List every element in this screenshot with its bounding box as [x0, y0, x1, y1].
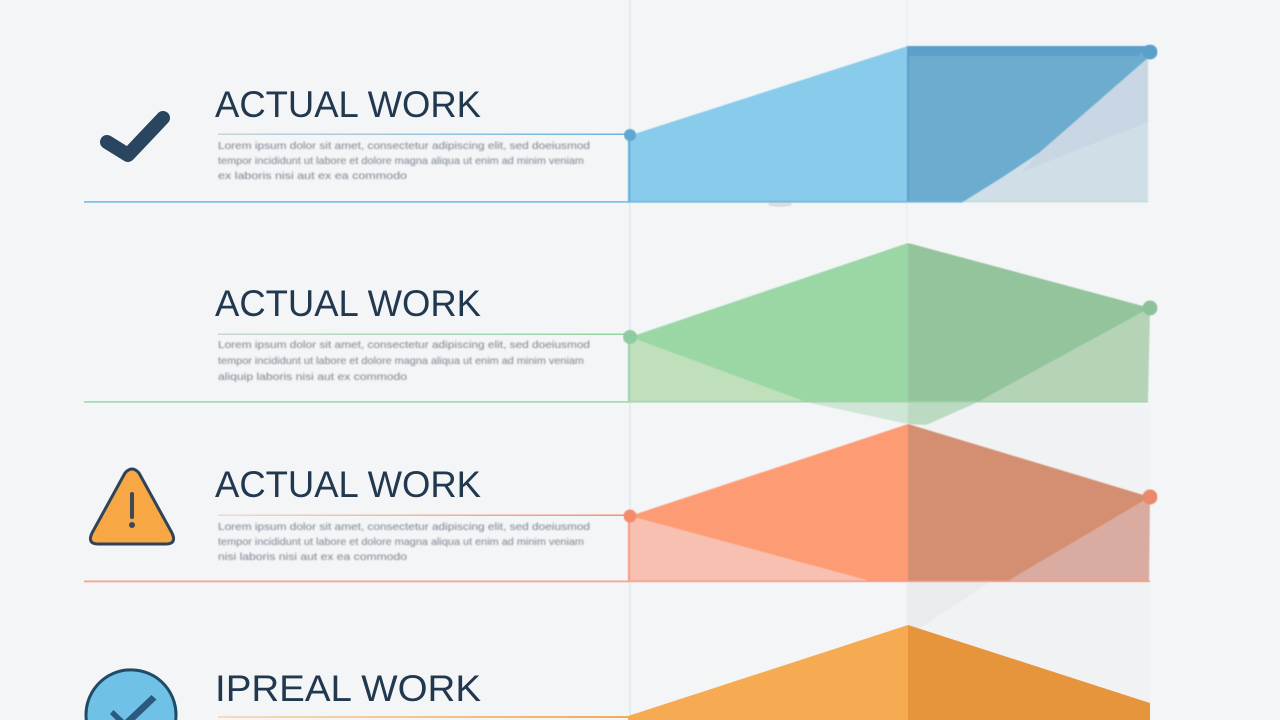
- text block: row 1: [218, 140, 590, 182]
- rule: row 4 upper: [218, 716, 628, 718]
- panel: row 1 blue: [84, 44, 1158, 207]
- text block: row 3: [218, 521, 590, 563]
- chart: green area: [623, 243, 1158, 425]
- icon: warning triangle: [90, 469, 174, 544]
- chart: orange area: [624, 424, 1158, 582]
- icon: check badge: [86, 670, 176, 720]
- text block: row 2: [218, 339, 590, 383]
- heading: row 1: ACTUAL WORK: [215, 84, 481, 125]
- chart: blue area: [624, 44, 1158, 207]
- rule: row 2 lower: [84, 401, 629, 403]
- rule: row 2 upper: [218, 334, 628, 335]
- text block: row 2: aliquip laboris nisi aut ex commodo: [218, 371, 407, 383]
- heading: row 4: IPREAL WORK: [215, 668, 481, 709]
- heading: row 3: ACTUAL WORK: [215, 464, 481, 505]
- chart: gold area: [628, 625, 1150, 720]
- panel: row 3 orange: [84, 424, 1158, 582]
- rule: row 1 upper: [218, 134, 628, 135]
- icon: check mark: [107, 118, 163, 155]
- panel: row 2 green: [84, 243, 1158, 425]
- rule: row 3 lower: [84, 580, 629, 582]
- text block: row 3: Lorem ipsum dolor sit amet, consectetur adipiscing elit, sed doeiusmod: [218, 521, 590, 533]
- text block: row 2: tempor incididunt ut labore et dolore magna aliqua ut enim ad minim veniam: [218, 355, 584, 367]
- heading: row 2: ACTUAL WORK: [215, 283, 481, 324]
- text block: row 1: ex laboris nisi aut ex ea commodo: [218, 170, 407, 182]
- text block: row 1: tempor incididunt ut labore et dolore magna aliqua ut enim ad minim veniam: [218, 155, 584, 167]
- text block: row 1: Lorem ipsum dolor sit amet, consectetur adipiscing elit, sed doeiusmod: [218, 140, 590, 152]
- rule: row 3 upper: [218, 514, 628, 516]
- panel: row 4 gold: [86, 625, 1150, 720]
- text block: row 3: nisi laboris nisi aut ex ea commodo: [218, 551, 407, 563]
- rule: row 1 lower: [84, 201, 629, 203]
- text block: row 3: tempor incididunt ut labore et dolore magna aliqua ut enim ad minim veniam: [218, 536, 584, 548]
- text block: row 2: Lorem ipsum dolor sit amet, consectetur adipiscing elit, sed doeiusmod: [218, 339, 590, 351]
